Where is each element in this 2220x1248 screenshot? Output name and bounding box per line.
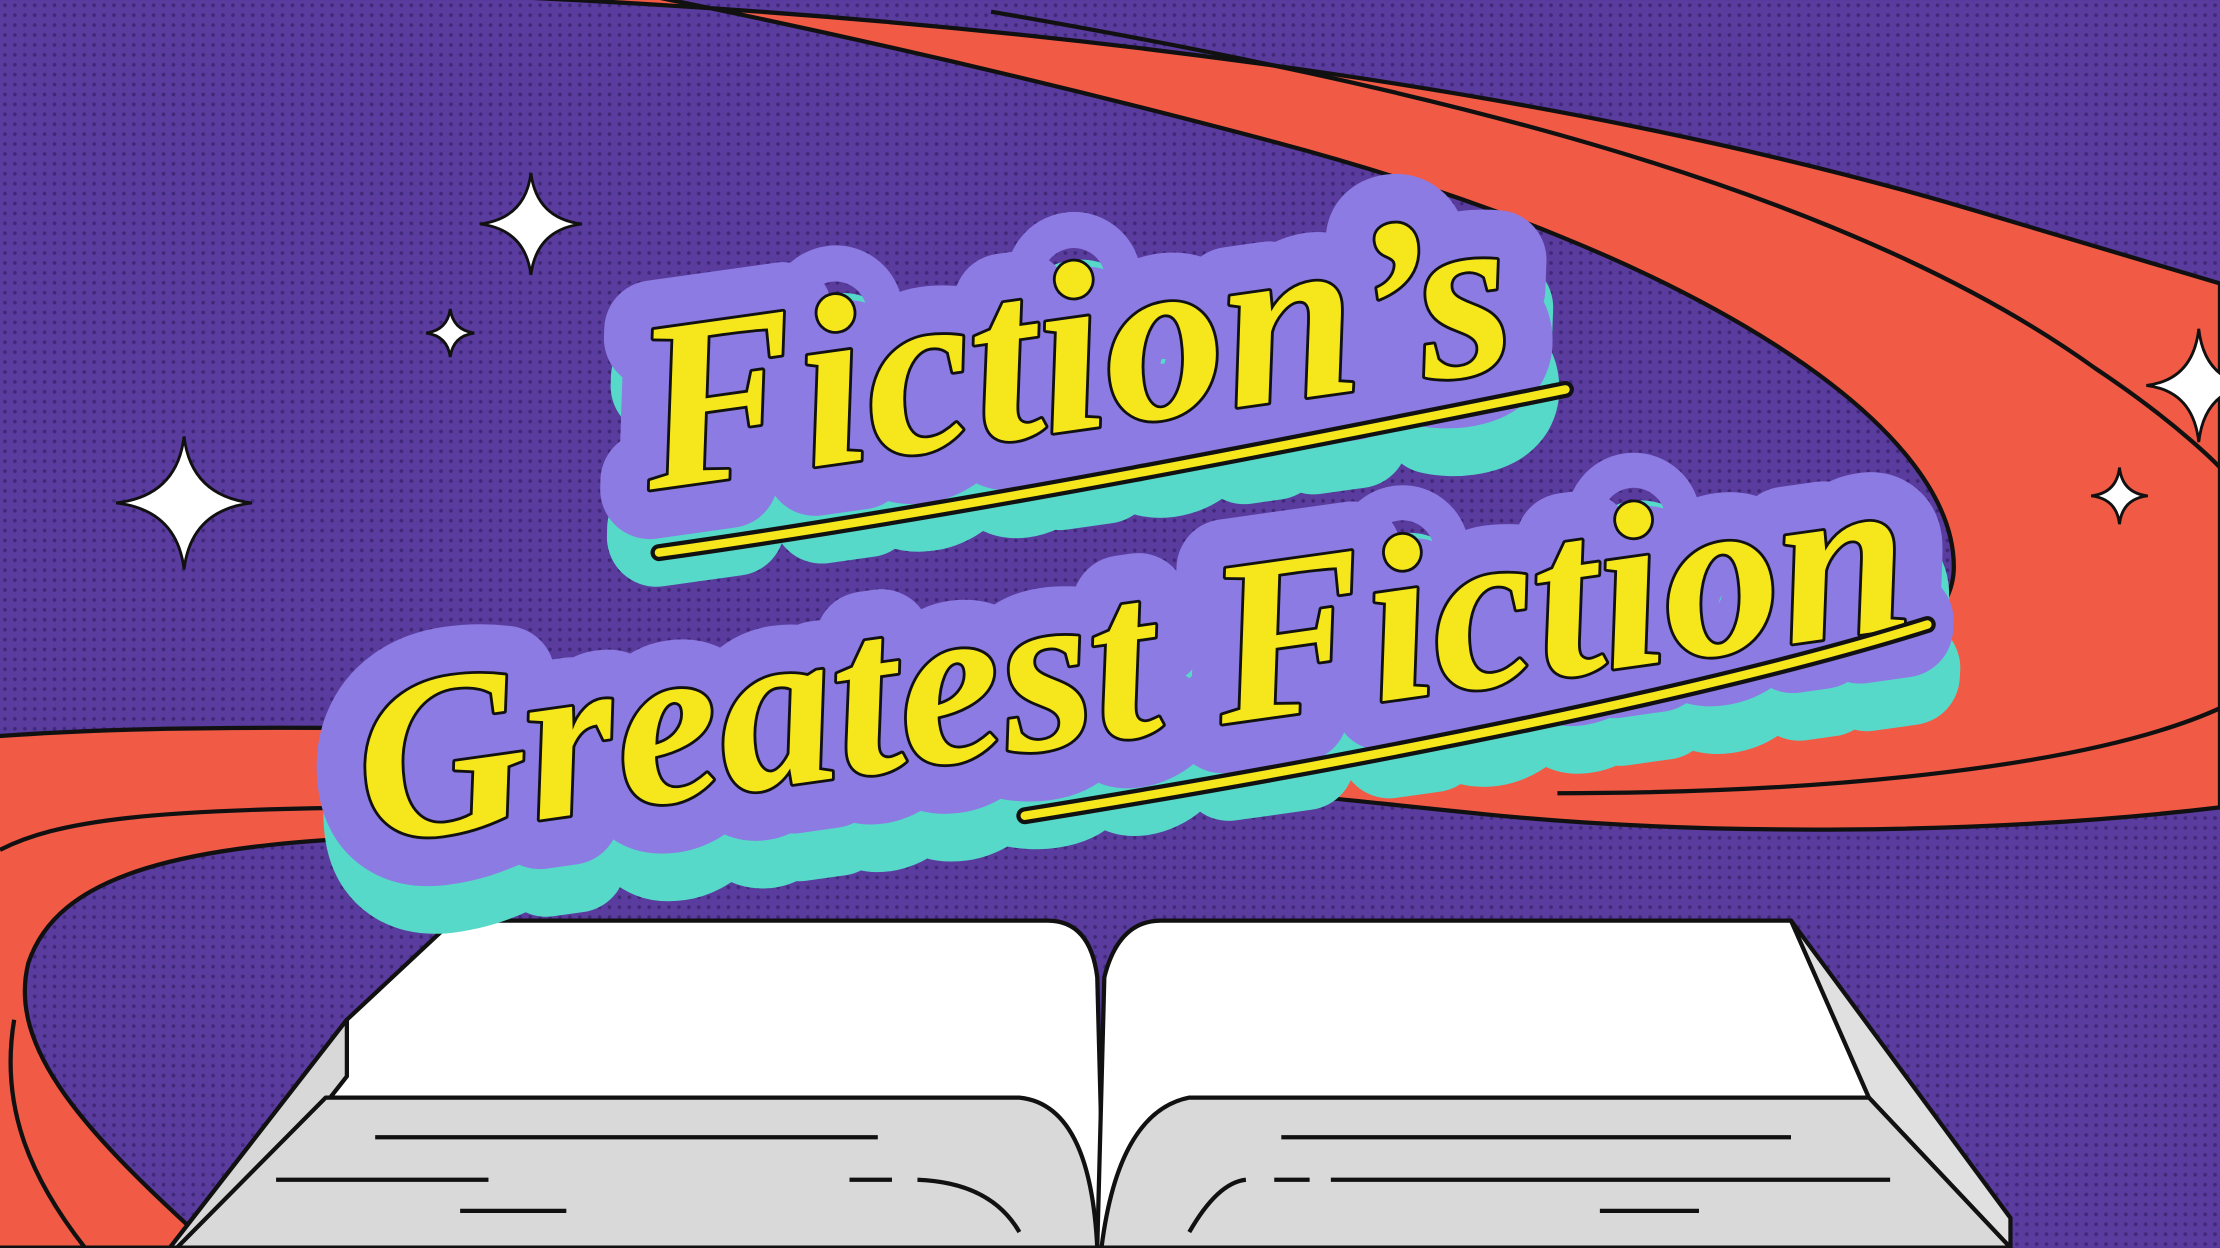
right page	[1097, 921, 2010, 1248]
book	[170, 921, 2010, 1248]
stars	[116, 173, 2220, 569]
purple bubble: Fiction’s	[619, 156, 1527, 542]
orange swoosh left	[0, 728, 453, 1248]
yellow lettering	[295, 107, 1924, 894]
yellow lettering: Fiction’s	[619, 156, 1527, 542]
teal shadow: Fiction’s	[626, 204, 1534, 590]
orange swoosh top-right	[425, 0, 2220, 830]
purple bubble	[295, 107, 1924, 894]
left page	[170, 921, 1104, 1248]
title	[295, 105, 1941, 942]
teal shadow: Greatest Fiction	[346, 468, 1930, 942]
yellow lettering: Greatest Fiction	[339, 420, 1924, 894]
teal shadow	[302, 154, 1930, 942]
underline swashes	[654, 344, 1936, 861]
purple bubble: Greatest Fiction	[339, 420, 1924, 894]
